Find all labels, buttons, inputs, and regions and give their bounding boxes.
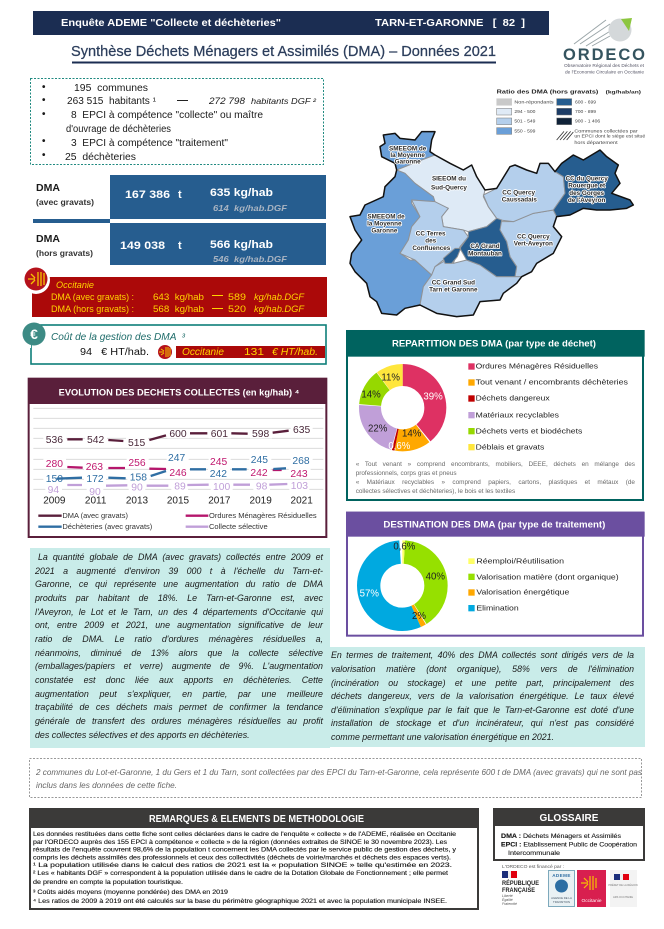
line chart: 2021 [291, 496, 313, 507]
icon: Occitanie cross [24, 268, 48, 290]
panel: DMA hors gravats: DMA [36, 233, 60, 245]
heading: destination [346, 512, 645, 537]
map region: SMEEOM Moyenne Garonne [350, 170, 435, 315]
panel: cost of DMA management: 94 € HT/hab. [80, 347, 149, 358]
text block: quantities: ont, entre 2009 et 2021, une augmentation significative de leur [35, 620, 323, 630]
panel background: treatment text [330, 647, 645, 747]
donut: waste type: 11% [381, 373, 400, 384]
map outline [350, 132, 633, 317]
map labels: CC Quercy [502, 189, 535, 196]
logo: ministère: PRÉFET DE LA RÉGION [608, 882, 638, 887]
panel: DMA hors gravats: 546 kg/hab.DGF [213, 254, 288, 264]
donut legend: waste type: Matériaux recyclables [476, 410, 559, 419]
note: waste categories: « Matériaux recyclables » comprend papiers, cartons, plastiques et métaux (de [356, 479, 635, 486]
logo: République Française: RÉPUBLIQUE [502, 878, 539, 887]
text block: quantities: (emballages/papiers et verre) augmente de 9%. L'augmentation [35, 661, 323, 671]
map legend [497, 90, 646, 146]
heading: repartition [346, 330, 645, 357]
logos: funders: L'ORDECO est financé par : [502, 864, 564, 870]
donut: waste type: 14% [402, 429, 422, 440]
logo: République Française: Égalité [502, 897, 513, 902]
logo: ORDECO: ORDECO [563, 46, 645, 64]
line chart: 2015 [167, 496, 190, 507]
donut: waste type: 14% [361, 390, 381, 401]
donut legend: waste type: Déchets dangereux [476, 394, 550, 403]
map labels: Sud-Quercy [431, 184, 467, 191]
text block: quantities: l'Aveyron, le Lot et le Tarn, un des 4 départements d'Occitanie qui [35, 607, 323, 617]
line chart: 100 [213, 482, 231, 493]
panel: remarks and methodology: résultats de l'enquête couvrent 98,6% de la population t concernent les DMA collectés par le service public de gestion des déchets, y [33, 846, 457, 854]
panel: destination [346, 512, 645, 636]
note: waste categories: professionnels, corps gras et pneus [356, 470, 457, 477]
donut legend: waste type: Déblais et gravats [476, 442, 545, 451]
map labels: CC Terres [416, 231, 446, 238]
line chart: 2017 [208, 496, 231, 507]
panel: cost of DMA management: 131 [244, 347, 265, 358]
line chart: 245 [210, 457, 228, 468]
map labels: la Moyenne [367, 220, 402, 227]
heading: remarks [29, 808, 479, 828]
map legend: 550 - 599 [514, 128, 536, 134]
logo: République Française [502, 871, 539, 906]
line chart: 598 [252, 429, 270, 440]
map labels: Vert-Aveyron [514, 241, 553, 248]
logo: ORDECO [563, 18, 645, 74]
line chart: 158 [130, 472, 147, 483]
title: Synthèse Déchets Ménagers et Assimilés (DMA) – Données 2021 [71, 43, 496, 60]
map region: CC du Quercy Rouergue [553, 150, 633, 217]
panel: Occitanie comparison: 643 kg/hab [153, 292, 204, 302]
panel: DMA avec gravats: t [178, 189, 182, 201]
chart legend: Déchèteries (avec gravats) [62, 522, 152, 531]
panel: glossary: Intercommunale [508, 850, 560, 857]
donut legend: treatment: Réemploi/Réutilisation [476, 557, 564, 566]
map region: CC Quercy Caussadais [483, 163, 565, 222]
map labels: Garonne [371, 228, 398, 235]
icon: euro coin: € [30, 326, 38, 342]
heading: destination: DESTINATION DES DMA (par type de traitement) [383, 520, 605, 530]
line chart: 600 [169, 429, 187, 440]
callout: communes note [30, 758, 642, 798]
map legend: Non-répondants [514, 100, 554, 106]
chart legend: DMA (avec gravats) [62, 511, 128, 520]
panel: remarks and methodology: ³ Coûts aidés moyens (moyenne pondérée) des DMA en 2019 [33, 889, 228, 896]
map legend: (kg/hab/an) [606, 90, 641, 96]
map labels [367, 145, 608, 294]
panel: evolution chart [28, 378, 327, 537]
line chart: 247 [168, 453, 186, 464]
header bar [33, 11, 549, 35]
heading: glossary [493, 808, 645, 826]
logo: République Française: Fraternité [502, 902, 517, 906]
line chart: 245 [251, 455, 268, 466]
panel: Occitanie comparison: DMA (hors gravats) : [51, 304, 134, 314]
map labels: de l'Aveyron [568, 197, 606, 204]
line chart: 256 [128, 458, 146, 469]
map labels: des Gorges [569, 190, 605, 197]
panel: Occitanie comparison: kg/hab.DGF [254, 292, 305, 302]
line chart: 542 [87, 435, 105, 446]
map region: CC Terres des Confluences [400, 200, 468, 275]
panel: glossary: EPCI : Etablissement Public de Coopération [501, 842, 637, 848]
map labels: SIEEOM du [432, 175, 466, 182]
panel: DMA hors gravats: (hors gravats) [36, 249, 93, 258]
map region: CA Grand Montauban [460, 218, 517, 277]
map legend: 501 - 549 [514, 119, 536, 125]
callout: communes note: 2 communes du Lot-et-Garonne, 1 du Gers et 1 du Tarn, sont collectées par des EPCI du Tarn-et-Garonne, cela représente 600 t de DMA (avec gravats) qui ne sont pas [35, 767, 642, 777]
panel: DMA hors gravats: t [178, 240, 182, 252]
logo: ADEME [548, 870, 574, 906]
panel: DMA avec gravats: 167 386 [125, 189, 170, 201]
map region: SMEEOM north [380, 132, 435, 170]
donut: waste type: 0,6% [388, 441, 411, 452]
header bar: TARN-ET-GARONNE [ 82 ] [375, 17, 525, 29]
logo: République Française: FRANÇAISE [502, 887, 535, 894]
line chart: 98 [256, 481, 268, 492]
text block: quantities: des collectes sélectives et des apports en déchèteries. [35, 730, 250, 740]
key figures box [30, 78, 324, 164]
key figures box: • [42, 82, 46, 93]
heading: evolution [28, 378, 327, 404]
logo: ADEME: ADEME [552, 873, 571, 878]
logo: ORDECO: Observatoire Régional des Déchets et [564, 63, 645, 68]
text block: treatment [331, 650, 634, 742]
line chart: 90 [131, 483, 143, 494]
header bar: Enquête ADEME "Collecte et déchèteries" [61, 17, 281, 29]
line chart: 89 [174, 481, 186, 492]
map labels: Confluences [412, 245, 451, 252]
key figures box: d'ouvrage de déchèteries [66, 124, 171, 135]
line chart: 150 [46, 474, 63, 485]
panel: cost of DMA management: € HT/hab. [272, 347, 318, 358]
text block: quantities: ratio de DMA. Le ratio d'ordures ménagères résiduelles a, [35, 634, 323, 644]
map labels: Garonne [395, 159, 421, 166]
panel: remarks and methodology: ⁴ Les ratios de 2009 à 2019 ont été calculés sur la base du périmètre géographique 2021 et avec la population municipale INSEE. [33, 898, 447, 905]
panel: DMA hors gravats: 149 038 [120, 240, 165, 252]
panel: remarks and methodology: ² Les « habitants DGF » correspondent à la population utilisée dans le cadre de la Dotation Globale de Fonctionnement ; elle permet [33, 870, 448, 877]
callout: communes note: inclus dans les données de cette fiche. [36, 780, 177, 790]
donut: treatment: 2% [412, 611, 426, 622]
donut legend: waste type: Déchets verts et biodéchets [476, 426, 583, 435]
note: waste categories [356, 461, 635, 495]
line chart: 515 [128, 438, 146, 449]
panel: remarks and methodology: de prendre en compte la population touristique. [33, 879, 183, 886]
donut: waste type [361, 373, 443, 452]
map legend: 900 - 1 406 [575, 119, 600, 125]
note: waste categories: « Tout venant » comprend encombrants, mobiliers, DEEE, déchets en mélange des [356, 461, 635, 468]
text block: quantities: Garonne, ce qui représente une augmentation du ratio de DMA [35, 579, 323, 589]
donut legend: waste type [468, 362, 628, 451]
text block: treatment: (incinération ou stockage) et une petite part, principalement des [331, 678, 634, 688]
map: EPCI ratios [350, 132, 633, 317]
text block: treatment: d'élimination s'explique par le fait que le Tarn-et-Garonne est doté d'une [331, 705, 634, 715]
map labels: SMEEOM de [367, 213, 405, 220]
key figures box: • [42, 95, 46, 106]
donut legend: treatment: Valorisation matière (dont organique) [476, 572, 619, 581]
heading: evolution: EVOLUTION DES DECHETS COLLECTES (en kg/hab) ⁴ [59, 387, 299, 397]
line chart: 103 [291, 481, 308, 492]
map labels: des [425, 238, 437, 245]
text block: quantities: augmentation peut s'expliquer, en partie, par une meilleure [35, 689, 323, 699]
line chart: 2009 [43, 496, 66, 507]
panel: DMA avec gravats: 614 kg/hab.DGF [213, 203, 288, 213]
panel: DMA avec gravats [33, 175, 326, 223]
donut: waste type: 39% [423, 392, 443, 403]
donut: treatment: 57% [360, 589, 379, 600]
line chart: 246 [169, 468, 187, 479]
map legend: 294 - 500 [514, 109, 536, 115]
line chart: 90 [89, 487, 101, 498]
map labels: CC Quercy [517, 233, 550, 240]
key figures box: 195 communes [74, 83, 148, 94]
line chart: 2013 [126, 496, 149, 507]
key figures box: • [42, 150, 46, 161]
panel: DMA avec gravats: 635 kg/hab [210, 187, 273, 199]
line chart: 2019 [250, 496, 272, 507]
map labels: Rouergue et [568, 183, 606, 190]
panel: Occitanie comparison: Occitanie [56, 280, 94, 290]
logo: Occitanie: Occitanie [582, 898, 602, 904]
donut: waste type: 22% [368, 424, 388, 435]
key figures box: • [42, 136, 46, 147]
panel: repartition [346, 330, 645, 500]
panel: remarks and methodology: ¹ La population utilisée dans le calcul des ratios de 2021 est la « population SINOE » telle qu'estimée en 2023. [33, 862, 452, 869]
donut: treatment: 0,6% [393, 542, 416, 553]
donut legend: treatment [468, 557, 619, 612]
text block: quantities: 2021 a augmenté d'environ 39 000 t à l'échelle du Tarn-et- [35, 566, 323, 576]
donut legend: treatment: Valorisation énergétique [476, 588, 569, 597]
line chart: 242 [210, 469, 227, 480]
line chart: 268 [292, 456, 310, 467]
panel: cost of DMA management: Coût de la gestion des DMA ³ [51, 332, 186, 343]
text block: quantities: générale de transfert des ordures ménagères résiduelles au profit [35, 716, 323, 726]
chart legend [38, 511, 317, 531]
line chart: 635 [293, 425, 311, 436]
panel: remarks and methodology: par l'ORDECO auprès des 155 EPCI à compétence « collecte » de la région (données extraites de SINOE le 30 novembre 2023). Les [33, 839, 448, 846]
panel: cost of DMA management [22, 322, 326, 364]
line chart: 280 [46, 459, 63, 470]
logo: ministère [608, 870, 638, 907]
donut: treatment: 40% [426, 572, 445, 583]
map region: CA Grand Montauban enclave [443, 248, 461, 263]
text block: treatment: comme permettant une valorisation énergétique en 2021. [331, 732, 554, 742]
key figures box: habitants DGF ² [251, 97, 316, 106]
map labels: Tarn et Garonne [429, 287, 478, 294]
key figures box: 8 EPCI à compétence "collecte" ou maître [71, 110, 264, 121]
panel: Occitanie comparison: 520 [228, 304, 246, 314]
panel: DMA avec gravats: (avec gravats) [36, 198, 94, 207]
icon: euro coin [22, 322, 46, 348]
key figures box: 25 déchèteries [65, 152, 136, 163]
map labels: CC du Quercy [566, 176, 608, 183]
line chart: 94 [48, 485, 59, 496]
logo: ORDECO: de l'Economie Circulaire en Occitanie [565, 70, 644, 74]
heading: remarks: REMARQUES & ELEMENTS DE METHODOLOGIE [149, 813, 364, 825]
text block: quantities: constatée est donc liée aux apports en déchèteries. Cette [35, 675, 323, 685]
line chart: 601 [211, 429, 228, 440]
chart legend: Collecte sélective [209, 522, 268, 531]
map labels: CA Grand [470, 243, 500, 250]
panel: glossary [493, 808, 645, 860]
map labels: SMEEOM de [389, 145, 427, 152]
map region: CC Grand Sud Tarn-et-Garonne [420, 260, 522, 317]
chart legend: Ordures Ménagères Résiduelles [209, 511, 317, 520]
text block: treatment: valorisation matière (dont organique), 58% vers de l'élimination [331, 664, 634, 674]
key figures box: 3 EPCI à compétence "traitement" [71, 138, 229, 149]
key figures box: 272 798 [208, 96, 245, 106]
donut: treatment [360, 542, 445, 622]
logo: ADEME: TRANSITION [553, 900, 570, 904]
panel: glossary: DMA : Déchets Ménagers et Assimilés [501, 833, 622, 840]
logo: ADEME: AGENCE DE LA [551, 896, 572, 900]
panel: cost of DMA management: Occitanie [182, 347, 224, 358]
map labels: Montauban [468, 250, 502, 257]
panel: Occitanie comparison: DMA (avec gravats) : [51, 292, 134, 302]
line chart: 263 [86, 462, 103, 473]
logo: ministère: ARS OCCITANIE [613, 895, 633, 899]
donut legend: treatment: Elimination [476, 603, 519, 612]
line chart [43, 425, 313, 507]
map legend: un EPCI dont le siège est situé [574, 134, 646, 140]
heading: glossary: GLOSSAIRE [540, 813, 599, 824]
map legend: Communes collectées par [574, 129, 638, 135]
text block: treatment: En termes de traitement, 40% des DMA collectés sont dirigés vers de la [331, 650, 634, 660]
map region: CC Quercy Vert-Aveyron [500, 210, 562, 277]
map labels: la Moyenne [390, 152, 425, 159]
panel: DMA hors gravats [36, 223, 326, 265]
map labels: Caussadais [502, 196, 537, 203]
line chart: 172 [86, 474, 104, 485]
map legend: Ratio des DMA (hors gravats) [497, 90, 598, 96]
panel: DMA hors gravats: 566 kg/hab [210, 239, 273, 251]
line chart: 2011 [85, 496, 107, 507]
heading: repartition: REPARTITION DES DMA (par type de déchet) [392, 339, 596, 349]
logos: funders [502, 864, 638, 907]
key figures box: • [42, 109, 46, 120]
text block: quantities [34, 552, 324, 740]
map legend: hors département [574, 140, 618, 146]
panel: Occitanie comparison: 568 kg/hab [153, 304, 204, 314]
panel: Occitanie comparison: kg/hab.DGF [254, 304, 305, 314]
map legend: 600 - 699 [575, 100, 596, 106]
panel: remarks and methodology: Les données restituées dans cette fiche sont celles déclarées dans le cadre de l'enquête « collecte » de l'ADEME, réalisée en Occitanie [33, 831, 456, 838]
logo: République Française: Liberté [502, 894, 513, 898]
text block: treatment: déchets dangereux, vers de la valorisation énergétique. Le taux élevé [331, 691, 634, 701]
panel: Occitanie comparison: 589 [228, 292, 246, 302]
panel background: quantities text [30, 548, 330, 748]
note: waste categories: collectes sélectives et déchèteries), le bois et les textiles [356, 488, 515, 495]
panel: remarks and methodology [29, 808, 479, 909]
text block: quantities: produits par habitant de 18%. Le Tarn-et-Garonne est, avec [35, 593, 323, 603]
text block: quantities: néanmoins, diminué de 13% alors que la collecte sélective [35, 648, 323, 658]
panel: DMA avec gravats: DMA [36, 182, 60, 194]
map labels: CC Grand Sud [432, 280, 475, 287]
line chart: 536 [46, 435, 63, 446]
line chart: 242 [250, 468, 268, 479]
map region: SIEEOM du Sud-Quercy [397, 155, 497, 232]
panel: Occitanie comparison [22, 266, 327, 317]
text block: treatment: installation de stockage et d'un incinérateur, qui n'est pas considéré [331, 718, 634, 728]
map legend: 700 - 899 [575, 109, 596, 115]
text block: quantities: La quantité globale de DMA (avec gravats) collectés entre 2009 et [38, 552, 323, 562]
donut legend: waste type: Tout venant / encombrants déchèteries [476, 378, 628, 387]
line chart: 243 [290, 469, 308, 480]
panel: remarks and methodology: compris les déchets assimilés des professionnels et ceux des collectivités (déchets de voirie/marchés et déchets des espaces verts). [33, 854, 451, 862]
text block: quantities: traçabilité de ces déchets mais permet de confirmer la tendance [35, 702, 323, 712]
key figures box: 263 515 habitants ¹ [67, 96, 157, 107]
donut legend: waste type: Ordures Ménagères Résiduelles [476, 362, 598, 371]
